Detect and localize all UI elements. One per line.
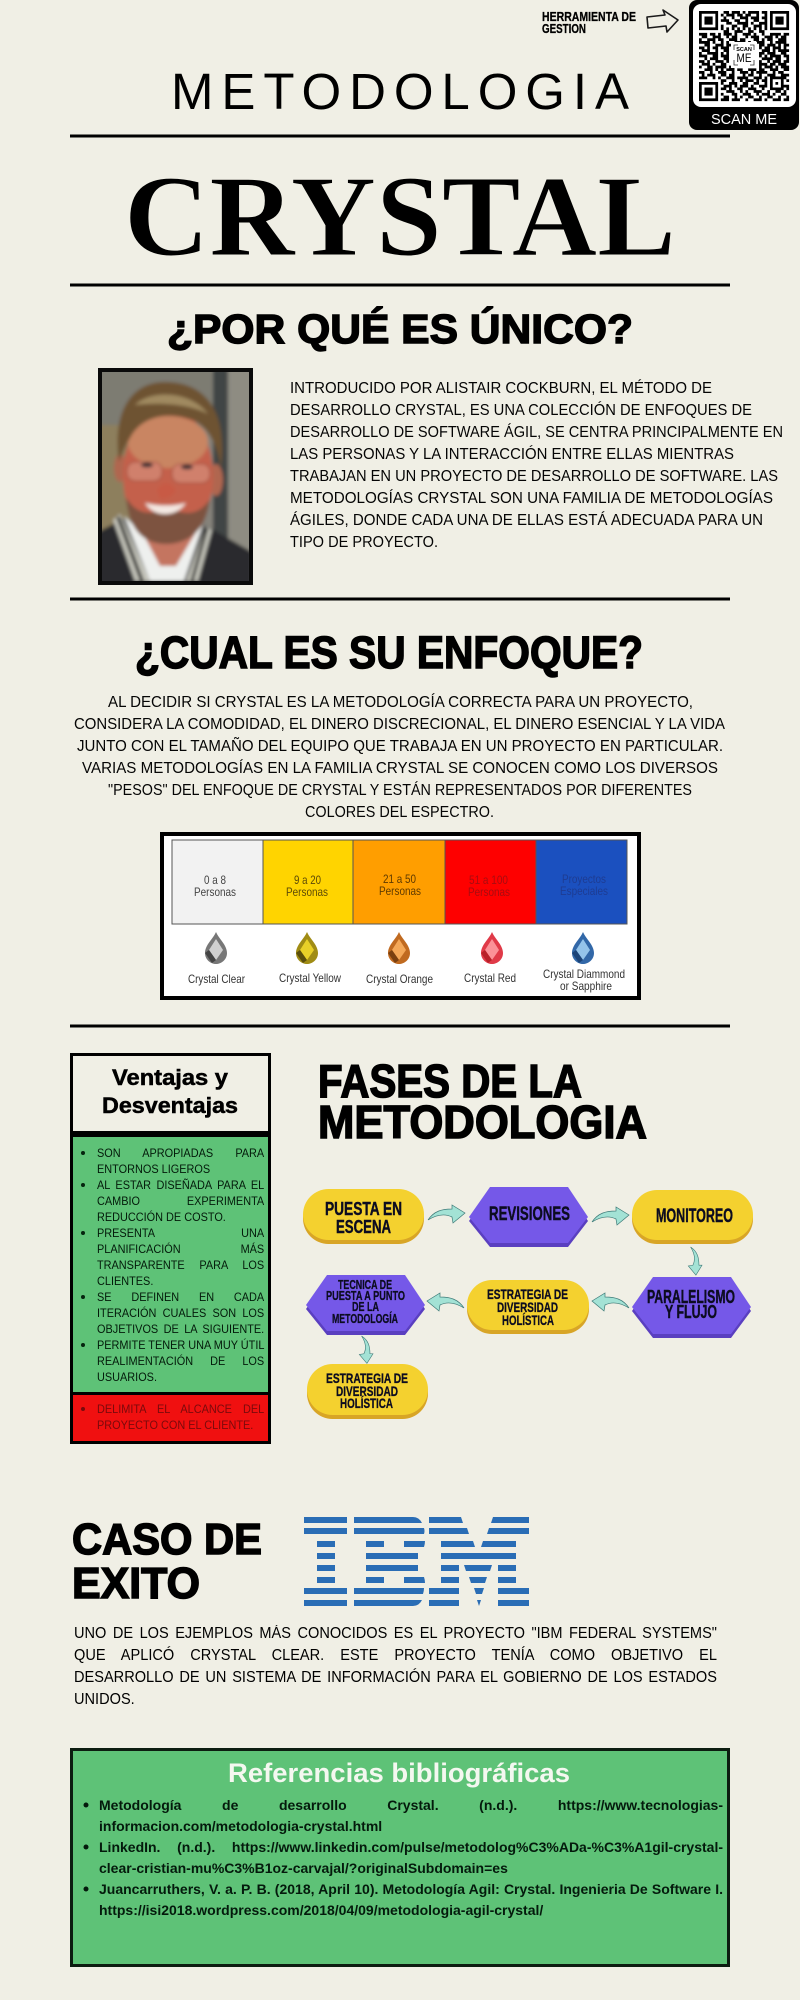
reference bullets	[84, 1802, 88, 1892]
list: desventajas: PROYECTO CON EL CLIENTE.	[97, 1418, 253, 1432]
list: ventajas: PRESENTA UNA	[97, 1226, 264, 1240]
band labels	[194, 872, 608, 899]
step: tecnica de puesta a punto: TECNICA DE	[338, 1277, 392, 1292]
band labels: 51 a 100	[469, 873, 508, 887]
band labels: Personas	[286, 885, 328, 899]
step: estrategia de diversidad holistica (final): ESTRATEGIA DE	[326, 1370, 408, 1386]
heading: fases de la metodologia: FASES DE LA	[318, 1055, 582, 1107]
QR code panel	[689, 0, 799, 130]
QR modules	[699, 12, 789, 100]
panel heading: Ventajas y	[112, 1065, 229, 1090]
QR center logo: SCAN	[736, 47, 752, 53]
step: tecnica de puesta a punto: METODOLOGÍA	[332, 1311, 398, 1326]
list: ventajas: ITERACIÓN CUALES SON LOS	[97, 1306, 264, 1320]
gem: yellow	[296, 932, 318, 964]
step: estrategia de diversidad holistica: DIVERSIDAD	[497, 1299, 558, 1315]
gem: orange	[388, 932, 410, 964]
logo: IBM	[304, 1517, 529, 1606]
list: references: clear-cristian-mu%C3%B1oz-carvajal/?originalSubdomain=es	[99, 1860, 508, 1876]
arrow 3	[688, 1247, 702, 1275]
text: enfoque paragraph	[74, 694, 726, 821]
bullet: desventaja	[81, 1407, 85, 1411]
panel: referencias bibliograficas	[72, 1750, 728, 1966]
step: estrategia de diversidad holistica: ESTRATEGIA DE	[487, 1286, 568, 1302]
gem names: Crystal Orange	[366, 972, 433, 986]
gem names: Crystal Clear	[188, 972, 245, 986]
gem names: Crystal Yellow	[279, 971, 341, 985]
list: desventajas: DELIMITA EL ALCANCE DEL	[97, 1402, 264, 1416]
text: enfoque paragraph: AL DECIDIR SI CRYSTAL ES LA METODOLOGÍA CORRECTA PARA UN PROYECTO,	[108, 694, 693, 711]
step: puesta en escena: PUESTA EN	[325, 1199, 402, 1219]
text: intro paragraph: DESARROLLO DE SOFTWARE ÁGIL, SE CENTRA PRINCIPALMENTE EN	[290, 424, 783, 441]
text: enfoque paragraph: VARIAS METODOLOGÍAS EN LA FAMILIA CRYSTAL SE CONOCEN COMO LOS DIVERSOS	[82, 760, 718, 777]
band labels: 0 a 8	[204, 873, 226, 887]
text: intro paragraph: TRABAJAN EN UN PROYECTO DE DESARROLLO DE SOFTWARE. LAS	[290, 468, 778, 485]
label: herramienta de gestion: GESTION	[542, 21, 586, 36]
text: caso de exito: UNO DE LOS EJEMPLOS MÁS CONOCIDOS ES EL PROYECTO "IBM FEDERAL SYSTEMS"	[74, 1625, 717, 1642]
step: estrategia de diversidad holistica (final): DIVERSIDAD	[336, 1383, 398, 1399]
list: desventajas	[97, 1402, 264, 1432]
list: ventajas: USUARIOS.	[97, 1370, 157, 1384]
text: enfoque paragraph: "PESOS" DEL ENFOQUE DE CRYSTAL Y ESTÁN REPRESENTADOS POR DIFERENTES	[108, 782, 692, 799]
list: ventajas: CAMBIO EXPERIMENTA	[97, 1194, 264, 1208]
step: tecnica de puesta a punto	[306, 1275, 425, 1335]
bullets: ventajas	[81, 1151, 85, 1347]
step: monitoreo: MONITOREO	[656, 1206, 733, 1227]
step: estrategia de diversidad holistica (final)	[307, 1364, 428, 1419]
gem names	[188, 967, 625, 993]
step: paralelismo y flujo: Y FLUJO	[665, 1302, 717, 1322]
chart: crystal colour scale	[162, 834, 639, 998]
step: puesta en escena: ESCENA	[336, 1217, 391, 1237]
arrow 1	[428, 1205, 465, 1223]
step: estrategia de diversidad holistica: HOLÍSTICA	[502, 1312, 554, 1328]
list: ventajas: REDUCCIÓN DE COSTO.	[97, 1210, 226, 1224]
list: ventajas: PERMITE TENER UNA MUY ÚTIL	[97, 1338, 264, 1352]
text: caso de exito	[74, 1625, 717, 1708]
list: ventajas: SE DEFINEN EN CADA	[97, 1290, 264, 1304]
heading: fases de la metodologia	[318, 1055, 647, 1148]
text: intro paragraph: ÁGILES, DONDE CADA UNA DE ELLAS ESTÁ ADECUADA PARA UN	[290, 512, 763, 529]
text: intro paragraph: DESARROLLO CRYSTAL, ES UNA COLECCIÓN DE ENFOQUES DE	[290, 402, 752, 419]
colour bands	[172, 840, 627, 924]
gem: clear	[205, 932, 227, 964]
list: ventajas: ENTORNOS LIGEROS	[97, 1162, 210, 1176]
list: ventajas	[97, 1146, 264, 1384]
text: intro paragraph: LAS PERSONAS Y LA INTERACCIÓN ENTRE ELLAS MIENTRAS	[290, 446, 734, 463]
band labels: Personas	[194, 885, 236, 899]
panel heading: Desventajas	[102, 1093, 238, 1118]
step: estrategia de diversidad holistica	[467, 1280, 589, 1334]
text: enfoque paragraph: JUNTO CON EL TAMAÑO DEL EQUIPO QUE TRABAJA EN UN PROYECTO EN PARTICULAR.	[77, 738, 723, 755]
panel heading	[102, 1065, 238, 1118]
step: revisiones: REVISIONES	[489, 1204, 570, 1225]
step: puesta en escena	[303, 1189, 424, 1244]
step: estrategia de diversidad holistica (final): HOLÍSTICA	[340, 1395, 393, 1411]
heading: caso de exito	[72, 1515, 262, 1608]
QR center logo	[731, 42, 757, 68]
heading: caso de exito: CASO DE	[72, 1515, 262, 1564]
label: herramienta de gestion: HERRAMIENTA DE	[542, 9, 636, 24]
step: paralelismo y flujo	[632, 1277, 751, 1338]
flow diagram	[303, 1187, 753, 1419]
list: references: informacion.com/metodologia-crystal.html	[99, 1818, 382, 1834]
list: ventajas: TRANSPARENTE PARA LOS	[97, 1258, 264, 1272]
heading: fases de la metodologia: METODOLOGIA	[318, 1096, 647, 1148]
QR caption: SCAN ME	[711, 112, 777, 128]
arrow 2	[592, 1207, 629, 1225]
text: intro paragraph: METODOLOGÍAS CRYSTAL SON UNA FAMILIA DE METODOLOGÍAS	[290, 490, 773, 507]
arrow 6	[359, 1336, 373, 1363]
references heading: Referencias bibliográficas	[228, 1758, 570, 1788]
band labels: 21 a 50	[383, 872, 416, 886]
gem: sapphire	[572, 932, 594, 964]
text: intro paragraph: INTRODUCIDO POR ALISTAIR COCKBURN, EL MÉTODO DE	[290, 380, 712, 397]
text: caso de exito: DESARROLLO DE UN SISTEMA DE INFORMACIÓN PARA EL GOBIERNO DE LOS ESTADOS	[74, 1669, 717, 1686]
list: references: Juancarruthers, V. a. P. B. (2018, April 10). Metodología Agil: Crystal. Ingenieria De Software I.	[99, 1881, 723, 1897]
list: references	[99, 1797, 723, 1918]
heading: cual es su enfoque: ¿CUAL ES SU ENFOQUE?	[135, 627, 643, 678]
heading: caso de exito: EXITO	[72, 1559, 200, 1608]
step: tecnica de puesta a punto: DE LA	[352, 1299, 379, 1314]
gem names: Crystal Diammond	[543, 967, 625, 981]
list: ventajas: AL ESTAR DISEÑADA PARA EL	[97, 1178, 264, 1192]
gem names: or Sapphire	[560, 979, 612, 993]
text: enfoque paragraph: COLORES DEL ESPECTRO.	[305, 804, 494, 821]
QR center logo: ME	[736, 51, 752, 65]
list: ventajas: SON APROPIADAS PARA	[97, 1146, 264, 1160]
photo: Alistair Cockburn	[98, 368, 253, 585]
label: herramienta de gestion	[542, 9, 636, 36]
list: references: https://isi2018.wordpress.com/2018/04/09/metodologia-agil-crystal/	[99, 1902, 543, 1918]
text: intro paragraph: TIPO DE PROYECTO.	[290, 534, 438, 551]
list: references: Metodología de desarrollo Crystal. (n.d.). https://www.tecnologias-	[99, 1797, 723, 1813]
band labels: Personas	[379, 884, 421, 898]
list: references: LinkedIn. (n.d.). https://www.linkedin.com/pulse/metodolog%C3%ADa-%C3%A1gil-crystal-	[99, 1839, 723, 1855]
band labels: 9 a 20	[294, 873, 321, 887]
icon: arrow to QR	[647, 10, 678, 32]
band labels: Proyectos	[562, 872, 606, 886]
list: ventajas: PLANIFICACIÓN MÁS	[97, 1242, 264, 1256]
list: ventajas: CLIENTES.	[97, 1274, 153, 1288]
gem names: Crystal Red	[464, 971, 516, 985]
text: caso de exito: UNIDOS.	[74, 1691, 135, 1708]
text: enfoque paragraph: CONSIDERA LA COMODIDAD, EL DINERO DISCRECIONAL, EL DINERO ESENCIAL Y LA VIDA	[74, 716, 726, 733]
title: metodologia: METODOLOGIA	[171, 63, 629, 120]
arrow 5	[427, 1293, 464, 1311]
title: crystal: CRYSTAL	[124, 153, 676, 281]
text: caso de exito: QUE APLICÓ CRYSTAL CLEAR. ESTE PROYECTO TENÍA COMO OBJETIVO EL	[74, 1647, 717, 1664]
list: ventajas: OBJETIVOS DE LA SIGUIENTE.	[97, 1322, 264, 1336]
band labels: Personas	[468, 885, 510, 899]
step: tecnica de puesta a punto: PUESTA A PUNTO	[326, 1288, 405, 1303]
band labels: Especiales	[560, 884, 608, 898]
step: paralelismo y flujo: PARALELISMO	[647, 1287, 735, 1307]
step: revisiones	[469, 1187, 588, 1247]
list: ventajas: REALIMENTACIÓN DE LOS	[97, 1354, 264, 1368]
step: monitoreo	[632, 1190, 753, 1244]
panel: ventajas y desventajas	[70, 1053, 271, 1444]
text: intro paragraph	[290, 380, 783, 551]
gem: red	[481, 932, 503, 964]
arrow 4	[592, 1293, 629, 1311]
heading: por que es unico: ¿POR QUÉ ES ÚNICO?	[167, 306, 633, 352]
